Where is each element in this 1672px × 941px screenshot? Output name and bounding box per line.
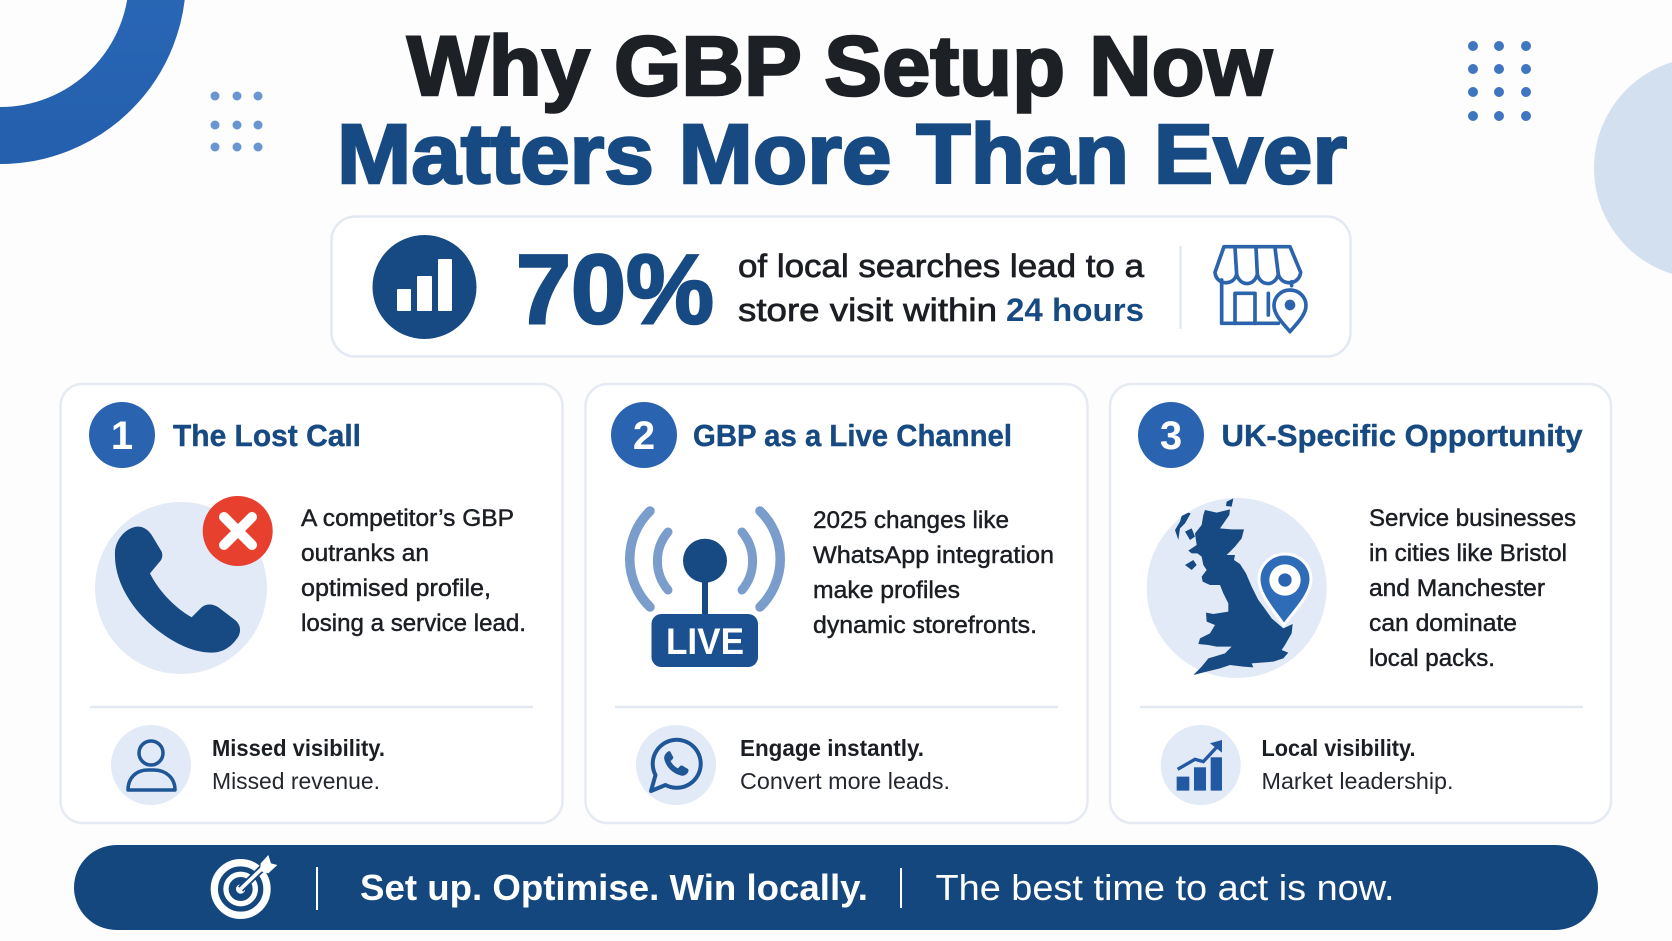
- body text: WhatsApp integration: [813, 542, 1054, 569]
- takeaway text: [1262, 735, 1454, 794]
- takeaway text: [740, 735, 950, 794]
- icon: bar chart badge: [372, 235, 476, 339]
- body text: outranks an: [301, 540, 429, 567]
- title: Matters More Than Ever: [337, 107, 1347, 201]
- banner regular text: The best time to act is now.: [936, 867, 1394, 908]
- body text: make profiles: [813, 577, 960, 604]
- icon: missed phone call: [95, 496, 273, 674]
- number badge 3: [1138, 402, 1204, 468]
- icon: live broadcast: [630, 511, 780, 667]
- body text: and Manchester: [1369, 575, 1545, 602]
- icon: target with arrow: [214, 855, 277, 915]
- number badge 3: 3: [1160, 414, 1182, 458]
- statistic text: 24 hours: [1006, 292, 1144, 328]
- title: Why GBP Setup Now: [407, 19, 1273, 113]
- body text: optimised profile,: [301, 575, 491, 602]
- body text: A competitor’s GBP: [301, 505, 514, 532]
- statistic number: 70%: [516, 234, 714, 344]
- decorative ring top-left: [0, 0, 158, 136]
- call-to-action banner: [74, 845, 1598, 930]
- decorative dots left: [210, 92, 262, 152]
- icon: live broadcast: LIVE: [666, 621, 744, 662]
- decorative circle right: [1594, 57, 1672, 279]
- takeaway text: Local visibility.: [1262, 735, 1416, 761]
- panel: GBP as a Live Channel: [586, 384, 1088, 823]
- statistic text: of local searches lead to a: [738, 248, 1144, 284]
- statistic text: store visit within: [738, 292, 997, 328]
- takeaway text: Missed visibility.: [212, 735, 385, 761]
- icon: person: [111, 725, 191, 805]
- body text: can dominate: [1369, 610, 1517, 637]
- body text: [301, 505, 526, 637]
- heading: The Lost Call: [173, 418, 361, 453]
- body text: local packs.: [1369, 645, 1495, 672]
- panel: key statistic: [332, 216, 1350, 356]
- icon: growth chart: [1161, 725, 1241, 805]
- banner bold text: Set up. Optimise. Win locally.: [360, 867, 868, 908]
- number badge 1: 1: [111, 414, 133, 458]
- statistic text: [738, 248, 1144, 328]
- takeaway text: Engage instantly.: [740, 735, 924, 761]
- heading: GBP as a Live Channel: [693, 418, 1012, 453]
- takeaway text: [212, 735, 385, 794]
- icon: UK map with pin: [1147, 498, 1327, 678]
- decorative dots right: [1468, 41, 1531, 121]
- icon: storefront with pin: [1215, 247, 1306, 332]
- takeaway text: Convert more leads.: [740, 768, 950, 794]
- takeaway text: Missed revenue.: [212, 768, 380, 794]
- heading: UK-Specific Opportunity: [1222, 418, 1583, 453]
- body text: [813, 507, 1054, 639]
- body text: in cities like Bristol: [1369, 540, 1567, 567]
- body text: Service businesses: [1369, 505, 1576, 532]
- number badge 2: [611, 402, 677, 468]
- body text: [1369, 505, 1576, 672]
- takeaway text: Market leadership.: [1262, 768, 1454, 794]
- body text: dynamic storefronts.: [813, 612, 1037, 639]
- number badge 2: 2: [633, 414, 655, 458]
- number badge 1: [89, 402, 155, 468]
- body text: 2025 changes like: [813, 507, 1009, 534]
- panel: UK-Specific Opportunity: [1110, 384, 1611, 823]
- body text: losing a service lead.: [301, 610, 526, 637]
- title: [337, 19, 1347, 201]
- icon: WhatsApp: [636, 725, 716, 805]
- panel: The Lost Call: [60, 384, 562, 823]
